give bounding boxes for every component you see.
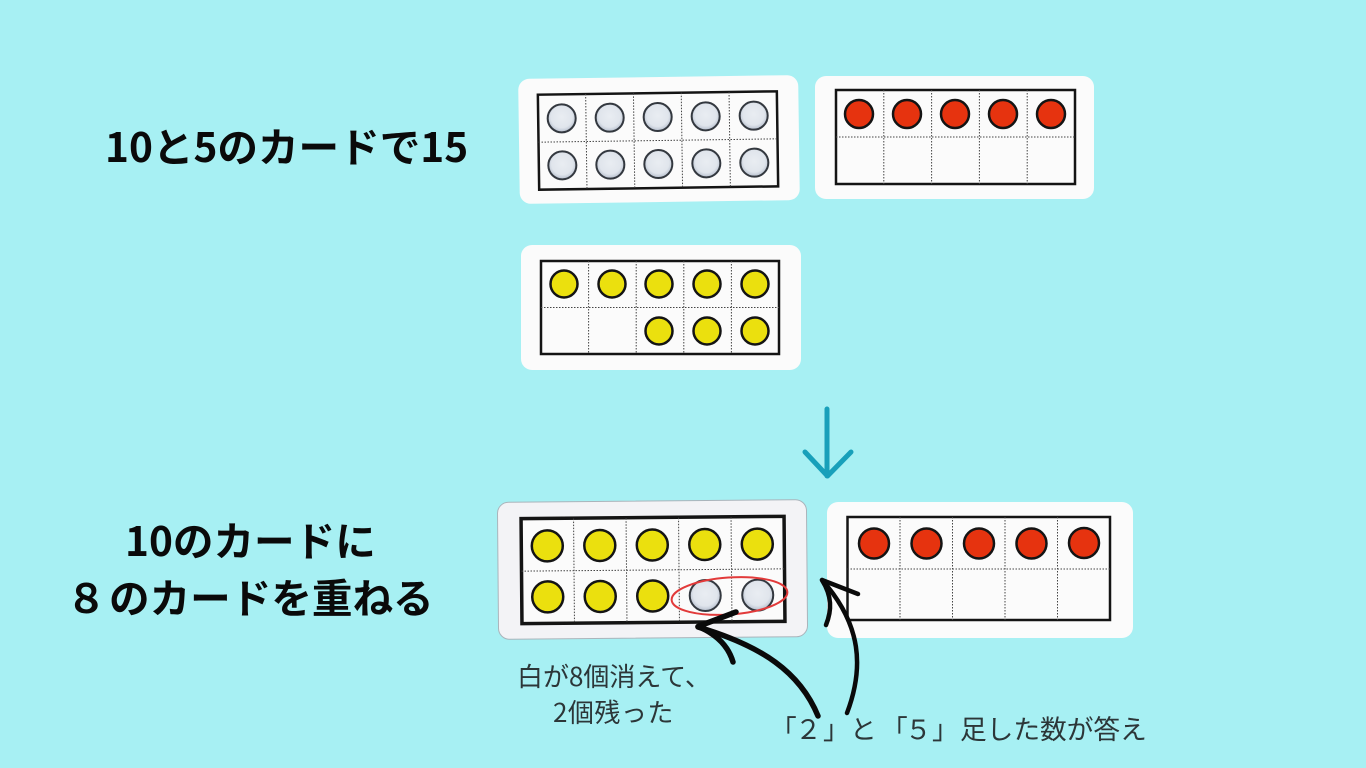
text: add 2 and 5 for the answer: ５: [905, 708, 932, 747]
text: add 2 and 5 for the answer: ２: [795, 708, 822, 747]
card: five red dots: [815, 76, 1094, 199]
arrow: from caption to remaining white dots: [698, 612, 818, 716]
text: add 2 and 5 for the answer: と: [850, 708, 877, 747]
text: add 2 and 5 for the answer: 足した数が答え: [960, 708, 1147, 747]
callout: red ellipse around remaining white dots: [670, 573, 789, 619]
heading: 10 and 5 cards make 15: 10と5のカードで15: [105, 115, 468, 174]
text: explanation of white dots: 2個残った: [553, 693, 674, 730]
card: overlaid yellow on white: [497, 500, 808, 639]
text: add 2 and 5 for the answer: 」: [932, 708, 959, 747]
heading: overlay the 8 card on the 10 card: [66, 509, 434, 625]
text: add 2 and 5 for the answer: 「: [881, 708, 908, 747]
heading: overlay the 8 card on the 10 card: 10のカードに: [125, 509, 376, 568]
heading: overlay the 8 card on the 10 card: ８: [66, 566, 107, 625]
arrow: teal down arrow: [805, 409, 851, 476]
text: explanation of white dots: [517, 657, 711, 730]
text: add 2 and 5 for the answer: 「: [770, 708, 797, 747]
arrow: from caption to five red dots: [822, 580, 858, 713]
card: eight yellow dots: [521, 245, 801, 370]
card: five red dots, enlarged: [827, 502, 1133, 638]
card: ten white dots: [518, 75, 800, 204]
text: add 2 and 5 for the answer: 」: [823, 708, 850, 747]
heading: overlay the 8 card on the 10 card: のカードを重ねる: [109, 566, 434, 625]
text: explanation of white dots: 白が8個消えて、: [517, 657, 711, 694]
